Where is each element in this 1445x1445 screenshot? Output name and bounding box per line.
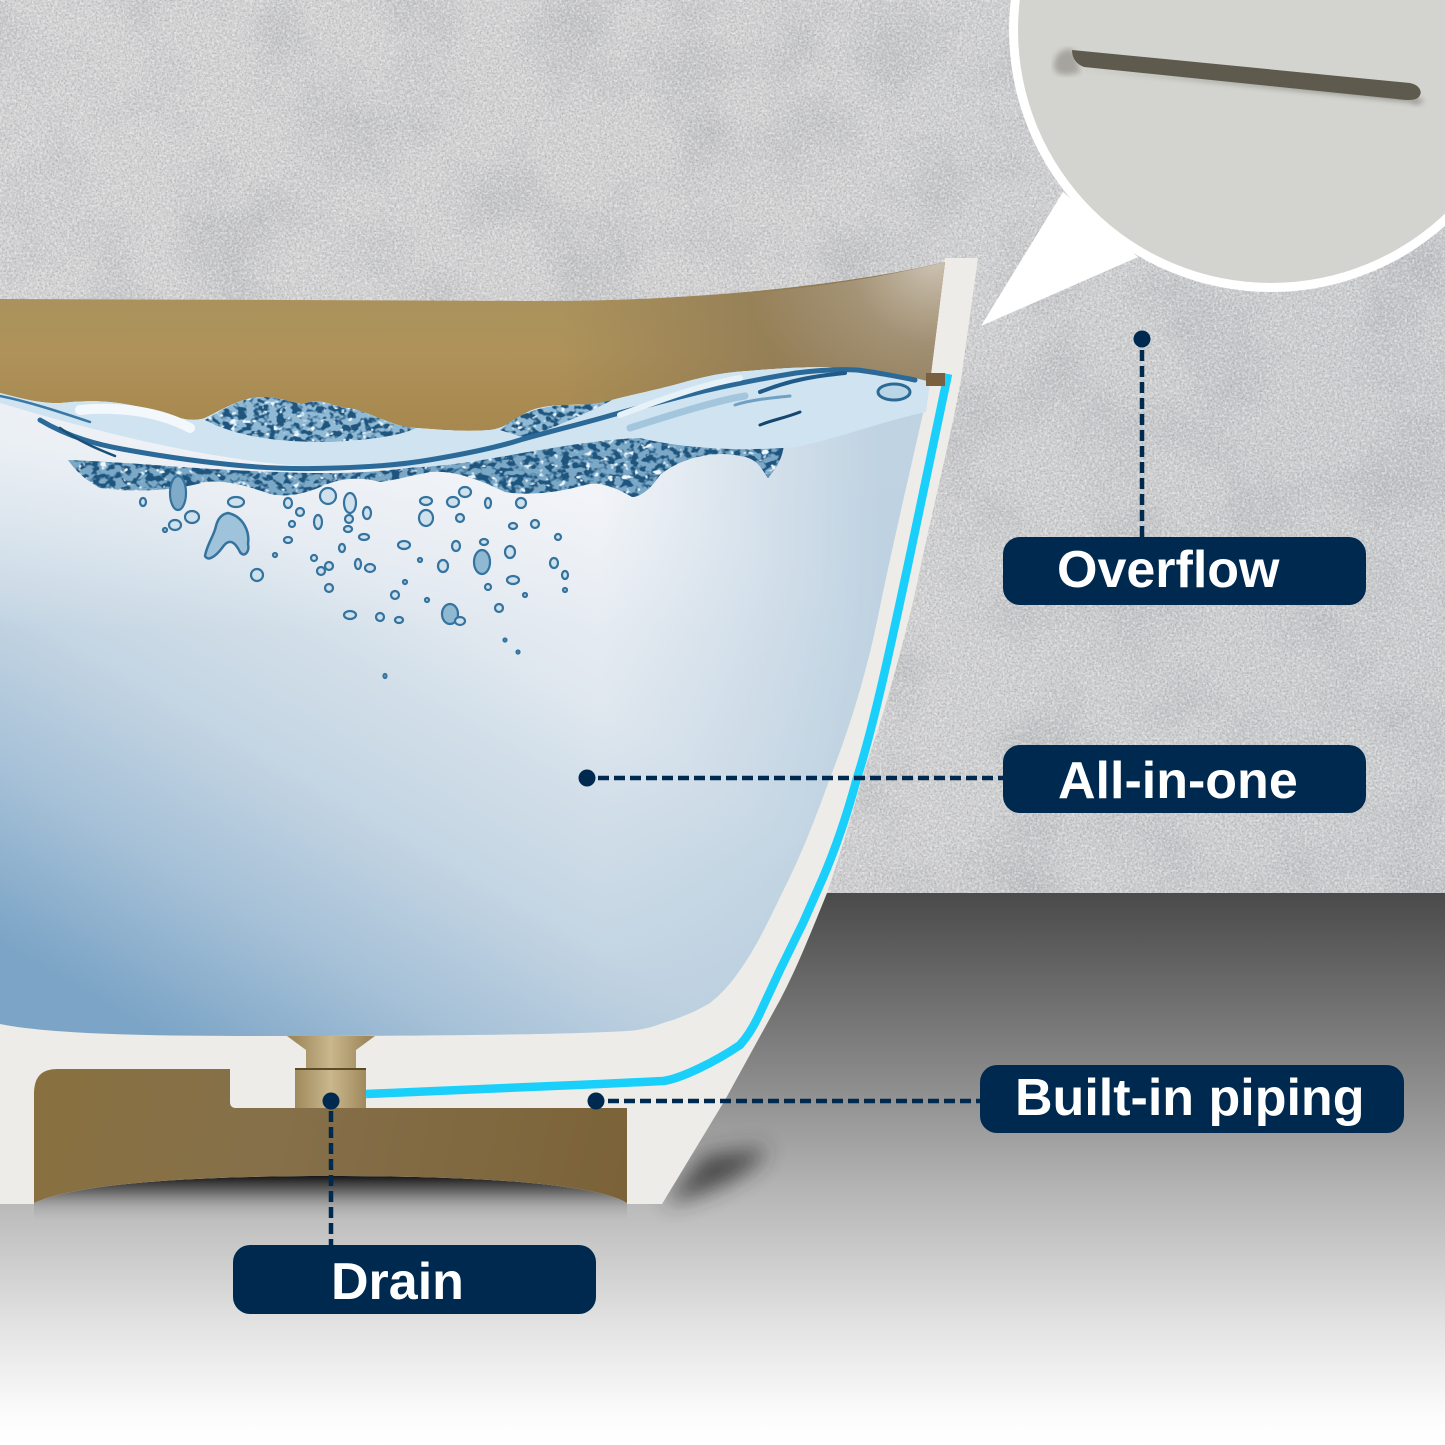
underwater foam cluster	[68, 428, 784, 497]
label: Overflow	[1003, 537, 1366, 605]
built-in piping	[366, 374, 948, 1094]
floor gradient	[0, 893, 1445, 1445]
drain fitting	[287, 1036, 375, 1108]
dark surface line	[40, 370, 915, 469]
label: Built-in piping: Built-in piping	[1015, 1069, 1364, 1127]
wave surface body	[0, 367, 930, 469]
leader: drain	[322, 1092, 340, 1245]
right crest	[500, 400, 612, 438]
surface bubble near overflow	[878, 384, 910, 400]
tub shadow on floor	[34, 1148, 768, 1220]
water surface wave	[0, 367, 930, 497]
splash crest	[205, 397, 416, 442]
label: Overflow: Overflow	[1057, 541, 1280, 599]
label: All-in-one: All-in-one	[1058, 752, 1298, 810]
surface highlights and streaks	[0, 373, 845, 456]
label: All-in-one	[1003, 745, 1366, 813]
tub shell	[0, 258, 978, 1204]
leader: built-in piping	[588, 1092, 980, 1110]
overflow fitting	[926, 373, 945, 386]
gold tub base	[34, 1069, 627, 1203]
leader: overflow	[1134, 330, 1150, 537]
label: Drain	[233, 1245, 596, 1314]
label: Drain: Drain	[331, 1253, 464, 1311]
leader: all-in-one	[578, 770, 1003, 786]
gold tub interior	[0, 262, 945, 500]
air bubbles	[140, 476, 568, 678]
water body	[0, 360, 940, 1040]
zoom callout: overflow slot	[981, 0, 1445, 326]
concrete wall background	[0, 0, 1445, 895]
